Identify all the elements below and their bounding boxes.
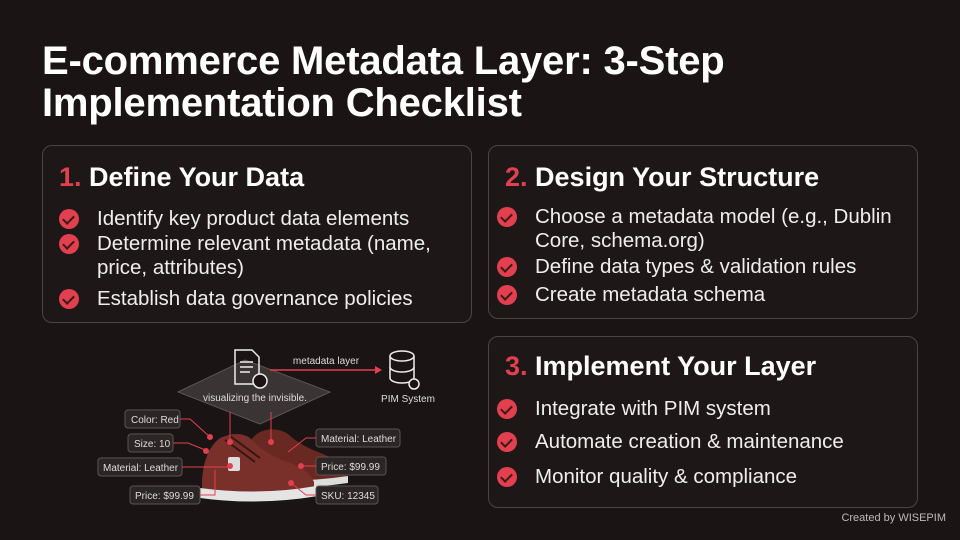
item: Determine relevant metadata (name, — [97, 232, 431, 255]
panel: define your data — [42, 145, 472, 323]
illustration: metadata layer — [98, 349, 435, 504]
illustration: metadata layer: Material: Leather — [321, 434, 397, 445]
diamond plane: visualizing the invisible. — [203, 393, 307, 404]
title — [42, 39, 725, 125]
illustration: metadata layer: Price: $99.99 — [135, 491, 194, 502]
panel: design structure — [488, 145, 918, 319]
heading 2: 2. Design Your Structure — [505, 162, 819, 192]
panel: implement layer — [488, 336, 918, 508]
heading 3: 3. Implement Your Layer — [505, 351, 816, 381]
item: Integrate with PIM system — [535, 397, 771, 420]
arrow: metadata layer: metadata layer — [293, 356, 360, 367]
title: E-commerce Metadata Layer: 3-Step — [42, 39, 725, 83]
icon: PIM database: PIM System — [381, 394, 435, 405]
shoes — [200, 429, 348, 502]
illustration: metadata layer: Material: Leather — [103, 463, 179, 474]
item: Establish data governance policies — [97, 287, 413, 310]
item: Monitor quality & compliance — [535, 465, 797, 488]
item: Choose a metadata model (e.g., Dublin — [535, 205, 892, 228]
diamond plane — [178, 360, 330, 424]
icon: PIM database — [381, 351, 435, 405]
item: Identify key product data elements — [97, 207, 409, 230]
illustration: metadata layer: SKU: 12345 — [321, 491, 375, 502]
item: Core, schema.org) — [535, 229, 705, 252]
item: price, attributes) — [97, 256, 244, 279]
heading 1: 1. Define Your Data — [59, 162, 304, 192]
footer credit: Created by WISEPIM — [841, 512, 946, 524]
title: Implementation Checklist — [42, 81, 522, 125]
illustration: metadata layer: Price: $99.99 — [321, 462, 380, 473]
item — [497, 205, 892, 252]
illustration: metadata layer: Color: Red — [131, 415, 179, 426]
callouts — [98, 410, 400, 504]
item: Define data types & validation rules — [535, 255, 856, 278]
illustration: metadata layer: Size: 10 — [134, 439, 171, 450]
item: Create metadata schema — [535, 283, 765, 306]
arrow: metadata layer — [270, 356, 382, 374]
icon: document — [235, 350, 267, 388]
item: Automate creation & maintenance — [535, 430, 844, 453]
item — [59, 232, 431, 279]
